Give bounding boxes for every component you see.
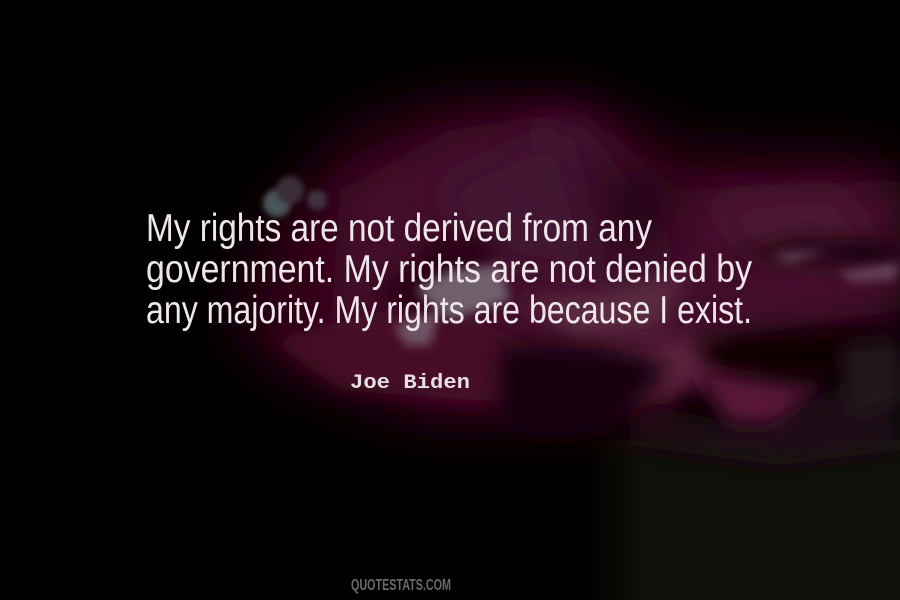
watermark: QUOTESTATS.COM xyxy=(351,577,451,594)
quote text xyxy=(146,207,752,332)
author attribution: Joe Biden xyxy=(350,372,470,395)
quote text: My rights are not derived from any xyxy=(146,207,652,250)
quote text: any majority. My rights are because I exist. xyxy=(146,289,752,332)
quote text: government. My rights are not denied by xyxy=(146,248,752,291)
